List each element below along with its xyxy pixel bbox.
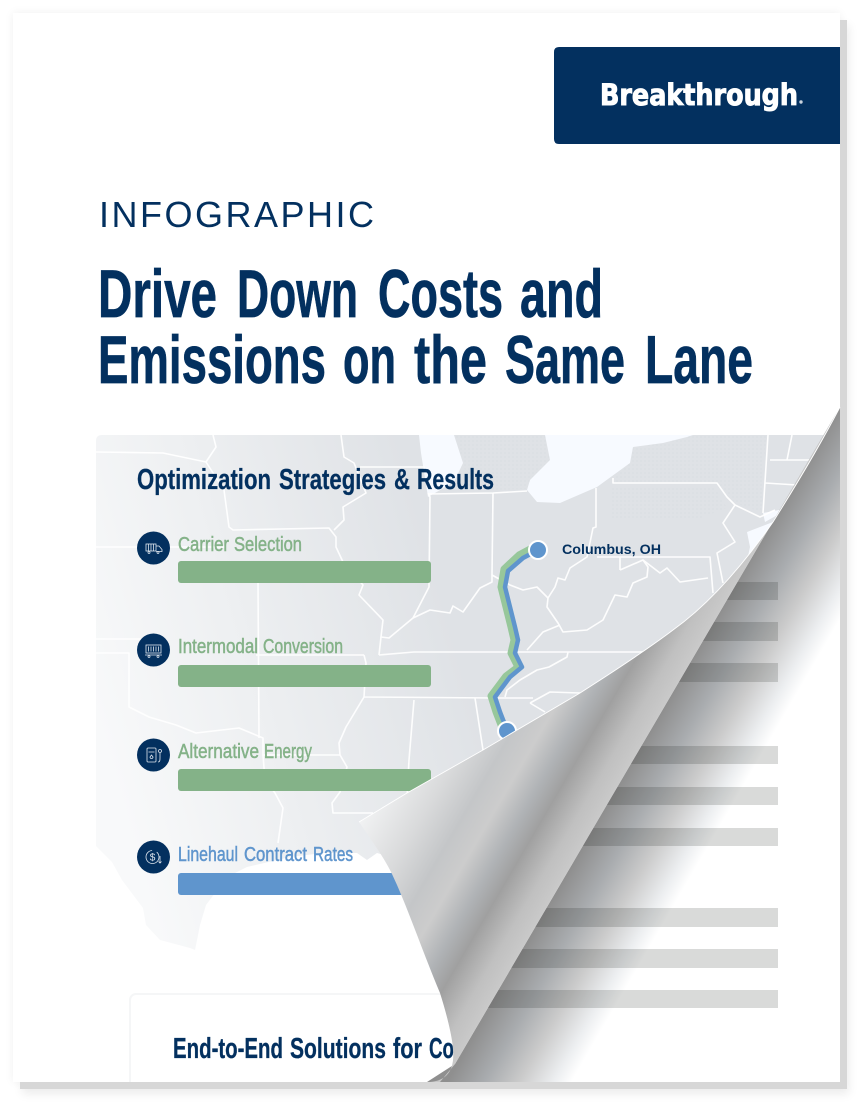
page curl flap: [359, 407, 840, 1082]
section heading: Results: [417, 464, 494, 496]
label: Energy: [264, 741, 312, 763]
label: Carrier: [178, 534, 229, 556]
icon: fuel pump: [137, 738, 170, 772]
section heading: Optimization: [137, 464, 271, 496]
label: Linehaul: [178, 844, 238, 866]
first page: map and strategies: [96, 435, 840, 1094]
second page under the curl: [427, 407, 840, 1082]
logo box: [554, 47, 840, 144]
section heading: [137, 464, 494, 496]
logo wordmark: Breakthrough: [600, 78, 798, 112]
card background: [129, 993, 440, 1082]
route line: [491, 547, 538, 730]
title line 2: the: [414, 322, 487, 398]
card heading: for: [393, 1033, 422, 1065]
card heading: End-to-End: [173, 1033, 283, 1065]
label: [178, 636, 343, 658]
bar: [178, 769, 431, 791]
icon: truck: [137, 532, 170, 564]
bar: [178, 665, 431, 687]
strategy: alternative energy: [137, 738, 431, 791]
label: Intermodal: [178, 636, 258, 658]
registered mark: [799, 100, 803, 104]
icon: dollar cycle: [137, 840, 170, 874]
label: Selection: [234, 534, 302, 556]
icon: rail car: [137, 634, 170, 666]
section heading: Strategies: [279, 464, 386, 496]
section heading: &: [394, 464, 410, 496]
card heading: [174, 1036, 454, 1058]
bar: [178, 873, 438, 895]
title line 2: Lane: [645, 322, 753, 398]
map of the eastern United States: [96, 435, 840, 950]
title line 1: Drive: [98, 256, 217, 332]
card heading: Solutions: [290, 1033, 386, 1065]
land mass: [96, 435, 840, 950]
title: [98, 256, 753, 398]
card heading: Co: [429, 1033, 454, 1065]
label: Contract: [244, 844, 307, 866]
state lines: [96, 435, 810, 843]
eyebrow: INFOGRAPHIC: [99, 194, 374, 235]
label: [178, 534, 302, 556]
title line 1: Down: [237, 256, 358, 332]
title line 2: Same: [505, 322, 625, 398]
stippled northern land: [456, 435, 766, 518]
label: Rates: [313, 844, 353, 866]
label: Alternative: [178, 741, 259, 763]
title line 2: Emissions: [98, 322, 326, 398]
icon: dollar cycle: $: [150, 852, 156, 864]
label: [178, 844, 353, 866]
title line 1: [98, 256, 603, 332]
bar: [178, 561, 431, 583]
strategy: linehaul contract rates: [137, 840, 438, 895]
page background: [427, 407, 840, 1082]
text placeholder bars: [488, 582, 778, 1008]
strategy: intermodal conversion: [137, 634, 431, 687]
title line 2: on: [343, 322, 396, 398]
pin: destination: [498, 722, 516, 740]
lakes: [419, 435, 780, 554]
curl shadow: [427, 407, 840, 1082]
label: Conversion: [263, 636, 343, 658]
label: Columbus, OH: Columbus, OH: [562, 541, 661, 557]
title line 1: and: [520, 256, 603, 332]
title line 1: Costs: [378, 256, 503, 332]
pin: Columbus: [529, 541, 547, 559]
title line 2: [98, 322, 753, 398]
strategy: carrier selection: [137, 532, 431, 583]
solutions card: [129, 993, 454, 1082]
